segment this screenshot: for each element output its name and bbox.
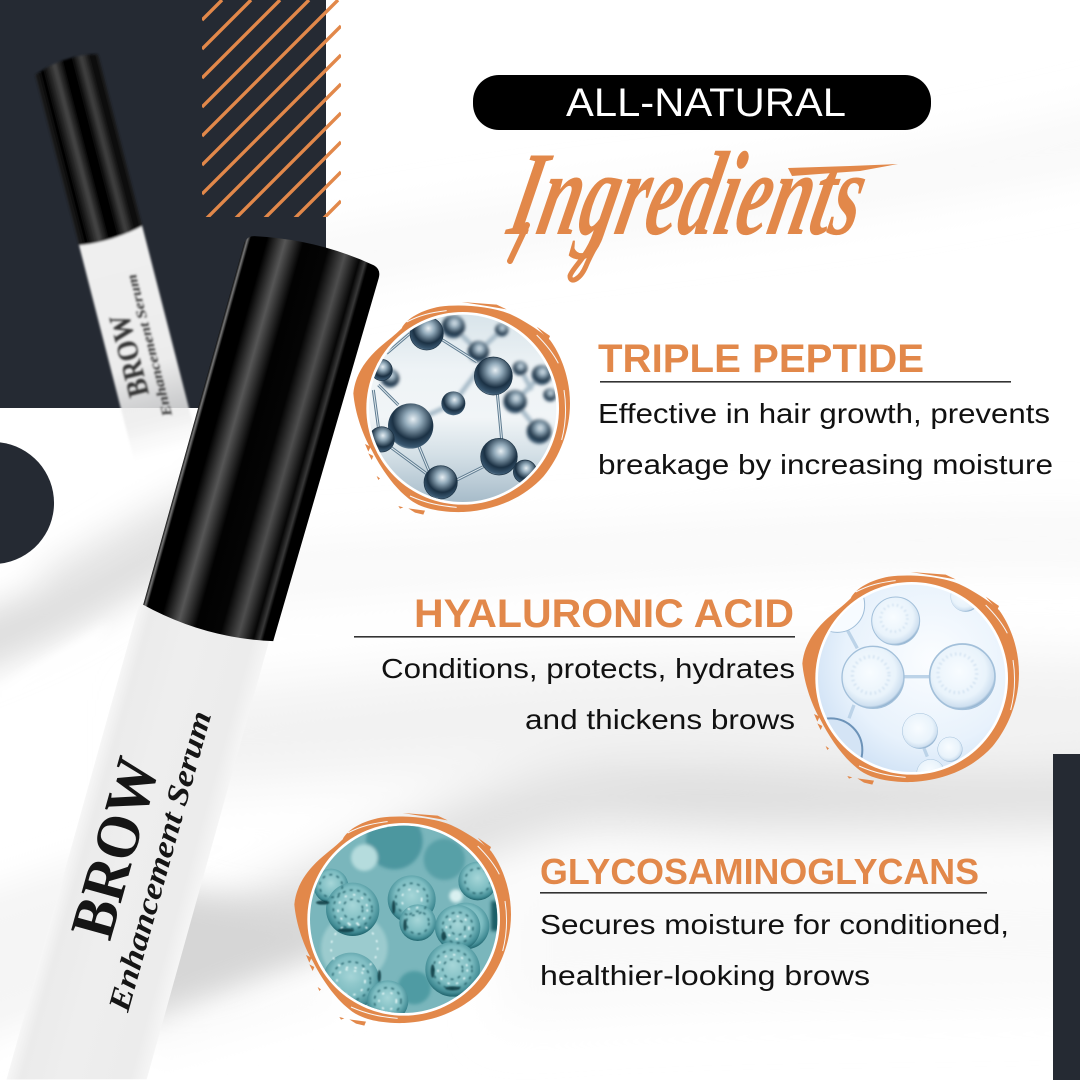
dark navy panel	[0, 0, 326, 408]
small tube label: BROW	[103, 311, 156, 400]
large tube body	[6, 596, 272, 1080]
heading: glycosaminoglycans: GLYCOSAMINOGLYCANS	[540, 851, 979, 892]
ingredient icon: triple peptide molecule	[353, 302, 570, 515]
navy side bar	[1053, 754, 1080, 1080]
text: hyaluronic acid description: and thickens brows	[525, 704, 795, 735]
heading: hyaluronic acid: HYALURONIC ACID	[414, 592, 794, 636]
large tube label: Enhancement Serum	[101, 707, 218, 1016]
diagonal orange stripes	[202, 0, 341, 223]
script heading: ingredients	[498, 128, 898, 280]
text: triple peptide description	[598, 398, 1053, 480]
text: glycosaminoglycans description	[540, 909, 1009, 991]
small blurred tube	[33, 51, 198, 460]
small tube label	[103, 272, 176, 419]
rule	[354, 636, 795, 638]
rule	[600, 381, 1011, 383]
text: triple peptide description: Effective in hair growth, prevents	[598, 398, 1050, 429]
large tube	[6, 225, 383, 1080]
small tube cap	[33, 51, 143, 247]
small tube label: Enhancement Serum	[125, 272, 176, 419]
text: hyaluronic acid description: Conditions, protects, hydrates	[381, 653, 795, 684]
script heading: ingredients: Ingredients	[498, 128, 879, 261]
ingredient icon: glycosaminoglycans bubbles	[294, 813, 511, 1026]
text: triple peptide description: breakage by increasing moisture	[598, 449, 1053, 480]
text: glycosaminoglycans description: Secures moisture for conditioned,	[540, 909, 1009, 940]
large tube label	[58, 707, 218, 1016]
text: glycosaminoglycans description: healthier-looking brows	[540, 960, 870, 991]
large tube cap	[141, 226, 383, 650]
small tube body	[78, 226, 198, 460]
ingredient icon: hyaluronic acid bubbles	[799, 572, 1019, 787]
badge: all-natural	[473, 75, 931, 130]
heading: triple peptide: TRIPLE PEPTIDE	[598, 337, 924, 381]
rule	[540, 892, 987, 894]
navy semicircle	[0, 442, 54, 564]
badge: all-natural: ALL-NATURAL	[566, 81, 846, 125]
text: hyaluronic acid description	[381, 653, 795, 735]
large tube label: BROW	[58, 750, 173, 946]
